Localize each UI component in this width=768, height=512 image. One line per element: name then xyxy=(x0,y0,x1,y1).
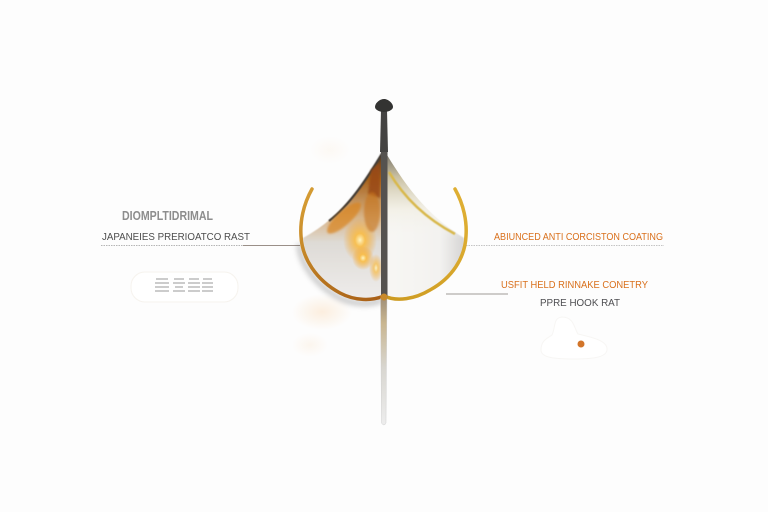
left sail xyxy=(303,150,384,299)
leader line: right lower xyxy=(446,293,508,295)
hook illustration xyxy=(292,99,466,425)
leader line: left xyxy=(101,244,300,246)
right heading: USFIT HELD RINNAKE CONETRY xyxy=(501,279,648,291)
left heading: DIOMPLTIDRIMAL xyxy=(122,209,213,223)
left subheading: JAPANEIES PRERIOATCO RAST xyxy=(102,231,251,243)
dark upper edge of left sail xyxy=(329,152,383,221)
lower rod xyxy=(380,298,387,425)
right sail xyxy=(384,150,464,299)
shadow xyxy=(299,244,382,303)
knob xyxy=(375,99,393,112)
gold highlight of right sail xyxy=(389,172,455,234)
glow haze around hook xyxy=(292,136,352,357)
right badge xyxy=(541,317,607,359)
right subheading: PPRE HOOK RAT xyxy=(540,297,621,309)
left label group xyxy=(102,209,251,243)
badge dot xyxy=(578,340,584,348)
left gold arm xyxy=(301,189,384,299)
leader line: right upper xyxy=(466,244,664,246)
central rod xyxy=(381,150,388,298)
right sail top shading xyxy=(384,150,464,299)
right gold arm xyxy=(384,189,466,299)
badge icons xyxy=(155,279,213,291)
right label: coating: ABIUNCED ANTI CORCISTON COATING xyxy=(494,231,663,243)
left badge xyxy=(131,272,238,302)
threaded shaft xyxy=(380,110,388,152)
fire glow xyxy=(323,163,383,282)
joint xyxy=(380,294,388,300)
right label group: geometry xyxy=(501,279,648,309)
